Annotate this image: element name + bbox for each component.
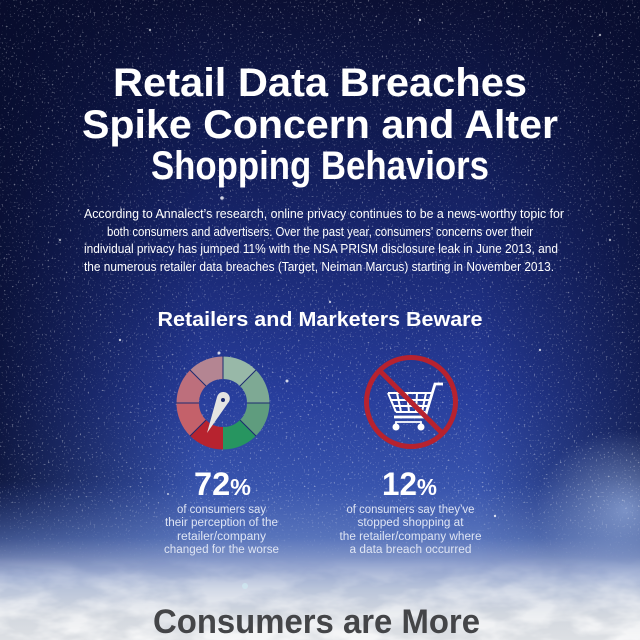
title: Shopping Behaviors bbox=[151, 144, 489, 188]
stat description: 12% bbox=[340, 504, 482, 556]
stat: 72% bbox=[164, 466, 279, 556]
title bbox=[82, 61, 558, 188]
stat description: 12%: of consumers say they’ve bbox=[346, 504, 474, 516]
stat description: 72%: changed for the worse bbox=[164, 544, 279, 556]
intro paragraph: individual privacy has jumped 11% with the NSA PRISM disclosure leak in June 2013, and bbox=[84, 242, 558, 256]
needle bbox=[207, 392, 230, 433]
stat: 12%: 12% bbox=[382, 466, 437, 502]
stat description: 12%: a data breach occurred bbox=[350, 544, 472, 556]
title: Spike Concern and Alter bbox=[82, 103, 558, 147]
icon: no shopping cart bbox=[366, 358, 456, 446]
section heading: consumers: Consumers are More bbox=[153, 603, 480, 640]
stat: 72%: 72% bbox=[194, 466, 251, 502]
intro paragraph: both consumers and advertisers. Over the past year, consumers’ concerns over their bbox=[107, 225, 533, 239]
title: Retail Data Breaches bbox=[113, 61, 527, 105]
stat: 12% bbox=[340, 466, 482, 556]
prohibition sign bbox=[366, 358, 456, 446]
stat description: 72%: of consumers say bbox=[177, 504, 266, 516]
section heading: Retailers and Marketers Beware bbox=[158, 309, 482, 331]
shopping cart bbox=[388, 384, 443, 430]
intro paragraph bbox=[84, 207, 564, 274]
stat description: 12%: the retailer/company where bbox=[340, 531, 482, 543]
intro paragraph: According to Annalect’s research, online privacy continues to be a news-worthy topic for bbox=[84, 207, 564, 221]
stat description: 72%: retailer/company bbox=[177, 531, 266, 543]
stat description: 12%: stopped shopping at bbox=[358, 517, 464, 529]
icon: perception gauge bbox=[176, 356, 270, 450]
stat description: 72% bbox=[164, 504, 279, 556]
intro paragraph: the numerous retailer data breaches (Target, Neiman Marcus) starting in November 2013. bbox=[84, 260, 554, 274]
stat description: 72%: their perception of the bbox=[165, 517, 278, 529]
